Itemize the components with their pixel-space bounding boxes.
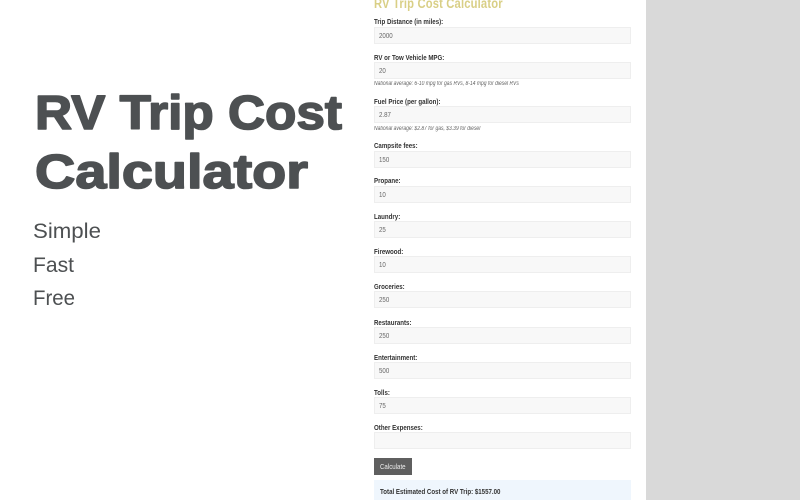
input: mpg: [374, 62, 631, 79]
text block: feature list: Fast: [33, 253, 74, 277]
input: entertainment: [374, 362, 631, 379]
input: fuel price: [374, 106, 631, 123]
label: restaurants: Restaurants:: [374, 318, 412, 327]
input: restaurants: 250: [379, 331, 389, 340]
hint: fuel price: National average: $2.87 for gas, $3.39 for diesel: [374, 126, 480, 132]
hint: mpg: National average: 6-10 mpg for gas RVs, 8-14 mpg for diesel RVs: [374, 81, 519, 87]
input: laundry: 25: [379, 225, 386, 234]
panel: grey right sidebar: [646, 0, 800, 500]
label: propane: Propane:: [374, 176, 401, 185]
input: firewood: [374, 256, 631, 273]
input: groceries: [374, 291, 631, 308]
input: laundry: [374, 221, 631, 238]
heading: main title: Calculator: [35, 146, 308, 199]
input: groceries: 250: [379, 295, 389, 304]
label: campsite fees: Campsite fees:: [374, 141, 418, 150]
input: campsite fees: 150: [379, 155, 389, 164]
input: other expenses: [374, 432, 631, 449]
input: tolls: 75: [379, 401, 386, 410]
heading: main title: [35, 87, 342, 199]
input: entertainment: 500: [379, 366, 389, 375]
input: fuel price: 2.87: [379, 110, 391, 119]
label: mpg: RV or Tow Vehicle MPG:: [374, 53, 444, 62]
label: groceries: Groceries:: [374, 282, 405, 291]
label: entertainment: Entertainment:: [374, 353, 417, 362]
input: campsite fees: [374, 151, 631, 168]
label: other expenses: Other Expenses:: [374, 423, 423, 432]
input: restaurants: [374, 327, 631, 344]
input: trip distance: [374, 27, 631, 44]
input: mpg: 20: [379, 66, 386, 75]
input: tolls: [374, 397, 631, 414]
label: laundry: Laundry:: [374, 212, 400, 221]
input: propane: [374, 186, 631, 203]
text block: feature list: Simple: [33, 219, 101, 243]
input: trip distance: 2000: [379, 31, 393, 40]
callout: total result: [374, 480, 631, 500]
heading: main title: RV Trip Cost: [35, 87, 342, 140]
panel: hero text: [33, 87, 342, 310]
label: tolls: Tolls:: [374, 388, 390, 397]
input: propane: 10: [379, 190, 386, 199]
text block: feature list: [33, 219, 101, 310]
label: firewood: Firewood:: [374, 247, 403, 256]
label: fuel price: Fuel Price (per gallon):: [374, 97, 440, 106]
callout: total result: Total Estimated Cost of RV Trip: $1557.00: [380, 487, 500, 496]
button: calculate: Calculate: [380, 462, 406, 471]
input: firewood: 10: [379, 260, 386, 269]
text block: feature list: Free: [33, 286, 75, 310]
button: calculate: [374, 458, 412, 475]
panel: calculator form: [374, 0, 631, 500]
label: trip distance: Trip Distance (in miles):: [374, 17, 443, 26]
